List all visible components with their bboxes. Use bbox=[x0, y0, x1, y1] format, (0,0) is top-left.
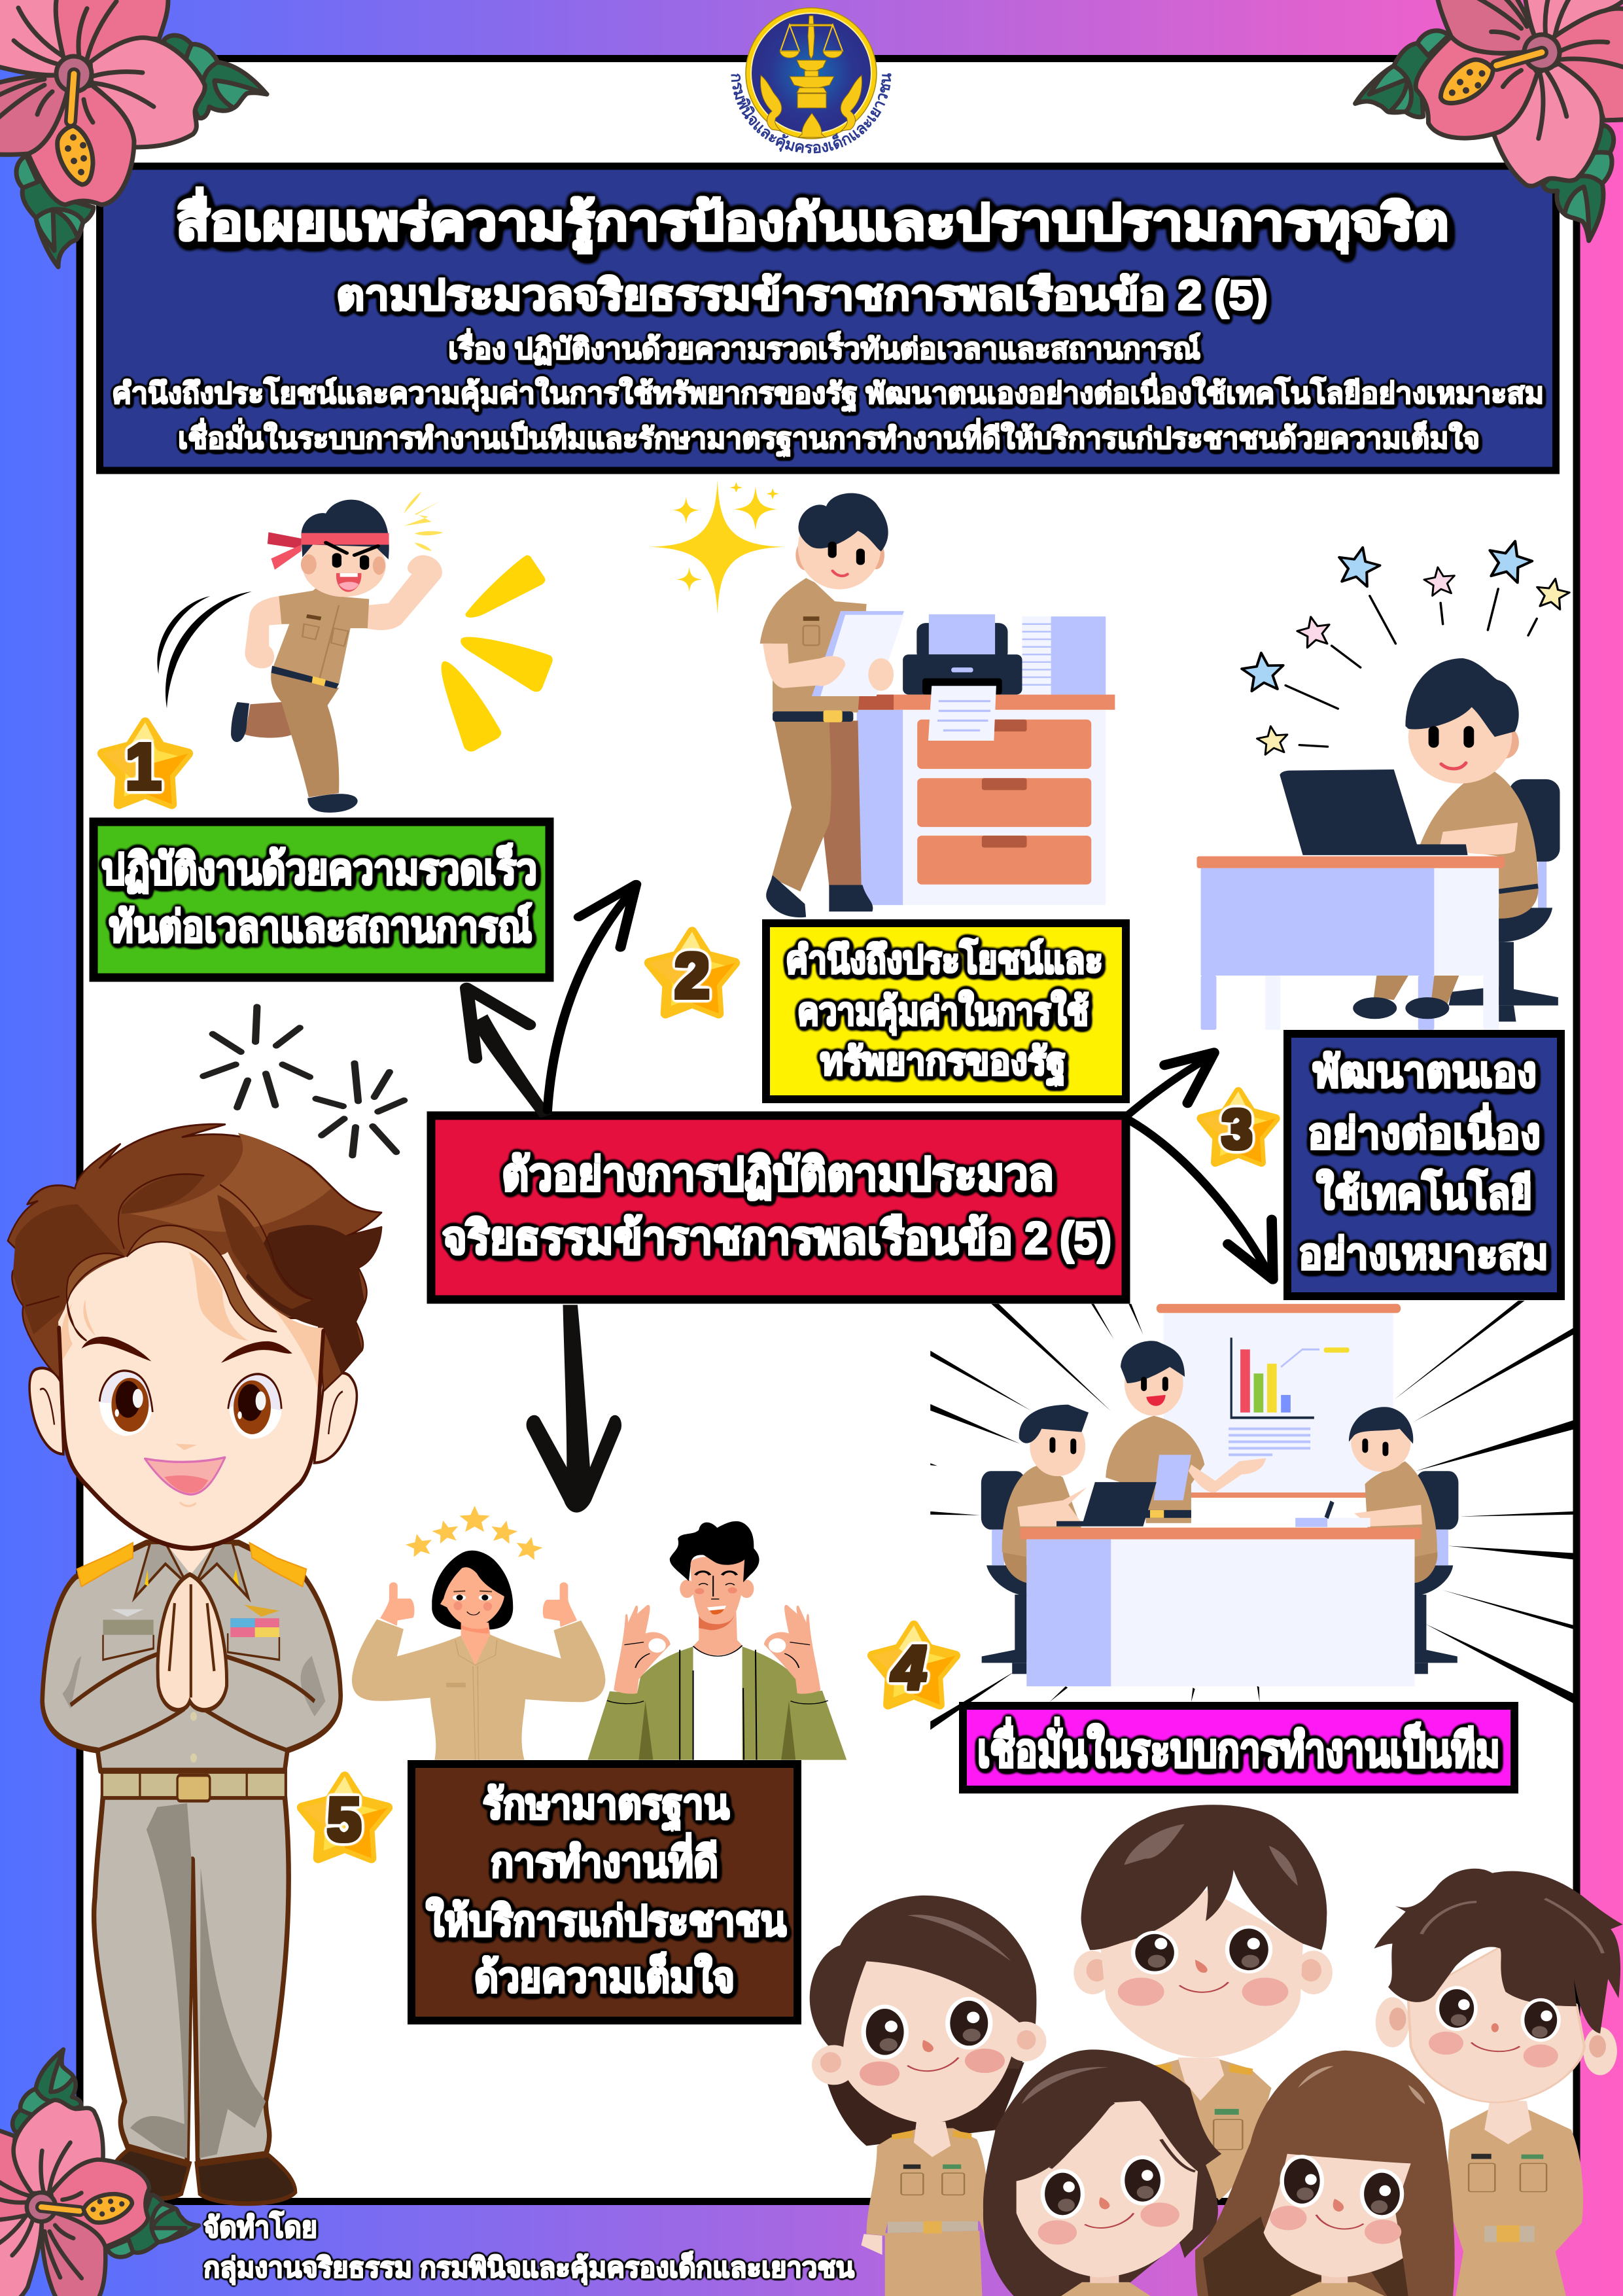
panel: step 5 brown box: การทำงานที่ดี bbox=[491, 1833, 718, 1886]
panel: step 5 brown box: ด้วยความเต็มใจ bbox=[474, 1952, 735, 2001]
panel: step 1 green box: ปฏิบัติงานด้วยความรวดเร็ว bbox=[101, 843, 537, 894]
officer front left woman bbox=[983, 2049, 1221, 2296]
star badge 5: 5 bbox=[327, 1785, 361, 1854]
star badge 3: 3 bbox=[1221, 1099, 1253, 1161]
panel: step 3 blue box: อย่างเหมาะสม bbox=[1299, 1229, 1548, 1278]
officer front right woman bbox=[1195, 2051, 1455, 2296]
panel: central red box: จริยธรรมข้าราชการพลเรือนข้อ 2 (5) bbox=[442, 1212, 1111, 1263]
icon: happy woman and man bbox=[352, 1506, 846, 1760]
illustration: five officers group bbox=[810, 1805, 1623, 2296]
description line 1: คำนึงถึงประโยชน์และความคุ้มค่าในการใช้ทรัพยากรของรัฐ พัฒนาตนเองอย่างต่อเนื่องใช้เทคโนโลยีอย่างเหมาะสม bbox=[112, 373, 1544, 412]
officer body bbox=[43, 1543, 341, 2204]
star badge 1 bbox=[102, 722, 188, 804]
description line 2: เชื่อมั่นในระบบการทำงานเป็นทีมและรักษามาตรฐานการทำงานที่ดีให้บริการแก่ประชาชนด้วยความเต็มใจ bbox=[178, 418, 1480, 457]
panel: step 1 green box: ทันต่อเวลาและสถานการณ์ bbox=[109, 902, 532, 951]
icon: flower top right bbox=[1318, 0, 1623, 300]
panel: step 2 yellow box: คำนึงถึงประโยชน์และ bbox=[786, 937, 1103, 981]
panel: step 3 blue box: ใช้เทคโนโลยี bbox=[1316, 1168, 1532, 1218]
panel: step 1 green box bbox=[94, 822, 550, 978]
icon: officer at laptop desk with stars bbox=[1196, 536, 1571, 1030]
panel: step 2 yellow box bbox=[766, 923, 1126, 1099]
panel: step 4 magenta box bbox=[963, 1706, 1514, 1790]
panel: step 3 blue box: พัฒนาตนเอง bbox=[1313, 1048, 1537, 1096]
five rating stars bbox=[404, 1506, 545, 1561]
footer credit text: จัดทำโดย bbox=[203, 2210, 317, 2244]
star badge 2 bbox=[649, 932, 735, 1014]
officer back centre bbox=[1073, 1805, 1333, 2200]
icon: flower bottom left bbox=[0, 2045, 205, 2296]
panel: step 5 brown box: รักษามาตรฐาน bbox=[483, 1780, 729, 1831]
icon: main officer wai character bbox=[8, 1124, 381, 2204]
arrow: to step 5 bbox=[527, 1305, 621, 1513]
icon: team meeting with speed lines bbox=[930, 1301, 1573, 1730]
panel: step 2 yellow box: ทรัพยากรของรัฐ bbox=[820, 1040, 1066, 1086]
icon: running officer bbox=[157, 491, 553, 813]
logo: กรมพินิจและคุ้มครองเด็กและเยาวชน bbox=[731, 73, 892, 153]
icon: officer at cabinet and printer bbox=[760, 493, 1115, 917]
panel: step 5 brown box bbox=[411, 1764, 797, 2021]
officer head bbox=[8, 1124, 381, 1548]
title: สื่อเผยแพร่ความรู้การป้องกันและปราบปรามการทุจริต bbox=[176, 187, 1449, 254]
star badge 4 bbox=[872, 1625, 956, 1704]
panel: step 5 brown box: ให้บริการแก่ประชาชน bbox=[426, 1897, 786, 1945]
arrow: to step 3 bbox=[1126, 1053, 1214, 1117]
subject line: เรื่อง ปฏิบัติงานด้วยความรวดเร็วทันต่อเวลาและสถานการณ์ bbox=[448, 328, 1200, 365]
panel: central red box bbox=[431, 1116, 1126, 1299]
star badge 1: 1 bbox=[125, 730, 162, 804]
subtitle: ตามประมวลจริยธรรมข้าราชการพลเรือนข้อ 2 (5) bbox=[336, 272, 1268, 319]
officer left woman bbox=[810, 1896, 1046, 2296]
officer right man bbox=[1374, 1869, 1623, 2296]
star badge 3 bbox=[1201, 1091, 1276, 1163]
icon: sparkles bbox=[649, 480, 784, 614]
arrow: to step 2 bbox=[548, 884, 636, 1110]
icon: flower top left bbox=[0, 0, 267, 267]
arrow: to step 1 bbox=[466, 988, 551, 1118]
panel: step 2 yellow box: ความคุ้มค่าในการใช้ bbox=[797, 989, 1089, 1036]
footer credit text bbox=[203, 2210, 854, 2285]
star badge 2: 2 bbox=[674, 940, 710, 1012]
star badge 4: 4 bbox=[891, 1633, 926, 1703]
panel: central red box: ตัวอย่างการปฏิบัติตามประมวล bbox=[502, 1149, 1054, 1201]
star badge 5 bbox=[302, 1776, 388, 1858]
icon: fireworks scribble bbox=[203, 1007, 404, 1156]
logo bbox=[731, 7, 892, 153]
panel: header bbox=[99, 166, 1556, 470]
panel: step 3 blue box bbox=[1287, 1034, 1561, 1296]
arrow: to step 4 bbox=[1128, 1120, 1273, 1279]
panel: step 4 magenta box: เชื่อมั่นในระบบการทำงานเป็นทีม bbox=[977, 1717, 1500, 1777]
panel: step 3 blue box: อย่างต่อเนื่อง bbox=[1308, 1103, 1541, 1157]
footer credit text: กลุ่มงานจริยธรรม กรมพินิจและคุ้มครองเด็กและเยาวชน bbox=[203, 2251, 854, 2285]
